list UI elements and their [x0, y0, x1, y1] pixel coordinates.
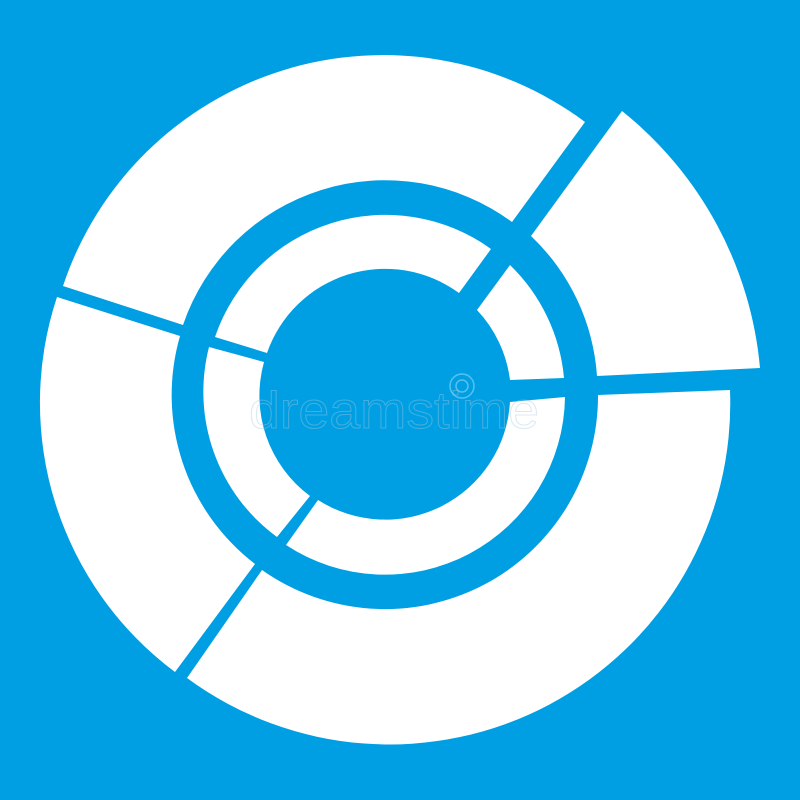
outer ring segments [40, 55, 760, 744]
segment: inner right [477, 265, 564, 380]
segment: inner left [203, 347, 310, 537]
segment: outer top-left [63, 55, 585, 325]
watermark text: dreamstime [249, 382, 539, 440]
segment: inner bottom [286, 397, 565, 575]
segment: outer top-right [531, 111, 760, 376]
watermark logo [450, 374, 474, 398]
segment: outer left [40, 297, 255, 672]
segment: outer bottom [187, 390, 730, 744]
watermark [249, 374, 539, 440]
segment: inner top [215, 215, 491, 353]
inner ring segments [203, 215, 565, 575]
